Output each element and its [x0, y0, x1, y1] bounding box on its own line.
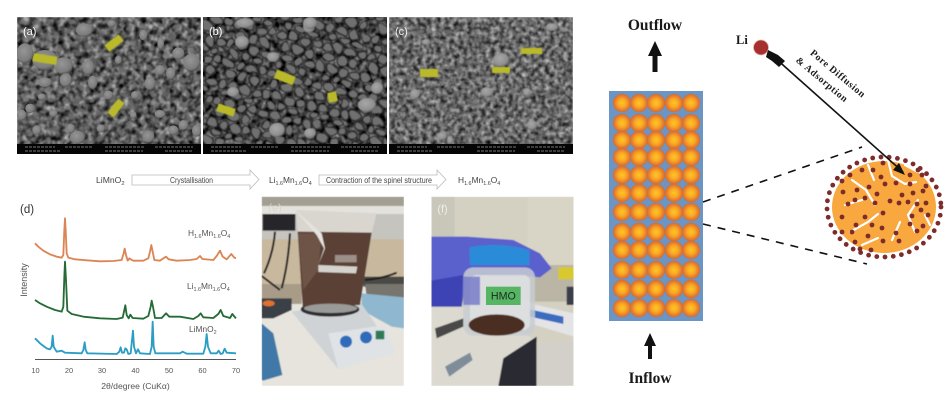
panel: SEM image (b) — [203, 17, 387, 154]
label (a): (a) — [23, 26, 36, 38]
trace label: Li1.6Mn1.6O4: O — [220, 281, 227, 291]
scale bar (b) — [203, 144, 387, 154]
label (d): (d) — [20, 204, 34, 216]
panel: porous adsorbent particle — [827, 157, 941, 257]
arrow: Contraction of the spinel structure: Contraction of the spinel structure — [326, 176, 432, 185]
trace: LiMnO2 — [35, 322, 236, 354]
arrow: inflow — [644, 333, 656, 359]
measurement tags (c) — [420, 48, 542, 77]
measurement tags (b) — [216, 70, 338, 117]
x axis: 2θ/degree (CuKα) — [101, 381, 170, 391]
heading: Outflow: Outflow — [628, 17, 683, 34]
y axis title: Intensity — [19, 263, 29, 297]
trace label: H1.6Mn1.6O4: H — [188, 228, 194, 238]
trace label: H1.6Mn1.6O4: O — [221, 228, 228, 238]
measurement tags (a) — [33, 34, 125, 118]
text: H1.6Mn1.6O4: 1.6 — [483, 181, 491, 187]
trace label: Li1.6Mn1.6O4: Li — [187, 281, 194, 291]
label (f): (f) — [437, 204, 448, 216]
text: H1.6Mn1.6O4: 4 — [497, 181, 500, 187]
scale bar (a) — [17, 144, 201, 154]
trace label: LiMnO2: 2 — [214, 330, 217, 336]
text: LiMnO2: LiMnO — [96, 175, 121, 185]
arrow: pore diffusion path — [766, 50, 905, 175]
adsorbed Li inside pores — [840, 161, 930, 252]
text: Li1.6Mn1.6O4: Mn — [283, 175, 295, 185]
dashed zoom lines — [703, 147, 867, 264]
x axis: 20 — [65, 366, 73, 375]
bead array — [613, 94, 700, 317]
panel: photo (f) HMO jar — [431, 197, 574, 386]
text: Li1.6Mn1.6O4: 1.6 — [276, 181, 283, 187]
heading: Inflow: Inflow — [628, 370, 672, 387]
outer ring of adsorbed Li — [827, 157, 941, 257]
HMO label: HMO — [491, 290, 516, 302]
trace label: Li1.6Mn1.6O4: 4 — [227, 287, 230, 293]
panel: XRD chart (d) — [19, 204, 240, 391]
trace label: Li1.6Mn1.6O4: Mn — [201, 281, 213, 291]
trace: H1.6Mn1.6O4 — [35, 218, 236, 261]
trace label: H1.6Mn1.6O4: Mn — [202, 228, 214, 238]
arrow: outflow — [648, 41, 662, 72]
text: H1.6Mn1.6O4: O — [491, 175, 498, 185]
trace label: H1.6Mn1.6O4: 1.6 — [194, 234, 202, 240]
trace label: Li1.6Mn1.6O4: 1.6 — [194, 287, 201, 293]
text: H1.6Mn1.6O4: H — [458, 175, 464, 185]
pore channels — [845, 160, 930, 245]
text: Li: Li — [736, 33, 748, 47]
text: H1.6Mn1.6O4: 1.6 — [464, 181, 472, 187]
scale bar (c) — [389, 144, 573, 154]
x axis: 60 — [198, 366, 207, 375]
x axis: 70 — [232, 366, 240, 375]
trace label: LiMnO2: LiMnO — [189, 324, 214, 334]
icon: lithium ion — [754, 40, 768, 55]
x axis: 40 — [131, 366, 140, 375]
text: LiMnO2: 2 — [121, 181, 125, 187]
trace: Li1.6Mn1.6O4 — [35, 262, 236, 319]
text: H1.6Mn1.6O4: Mn — [472, 175, 484, 185]
x axis: 30 — [98, 366, 106, 375]
panel: packed column of adsorbent beads — [609, 91, 703, 321]
x axis: 50 — [165, 366, 173, 375]
arrow: Contraction of the spinel structure — [319, 170, 446, 189]
label (b): (b) — [209, 26, 222, 38]
text: Pore Diffusion & Adsorption: Pore Diffusion — [808, 48, 868, 100]
trace label: H1.6Mn1.6O4: 4 — [227, 234, 230, 240]
arrow: Crystallisation — [132, 170, 259, 189]
arrow: Crystallisation: Crystallisation — [170, 176, 213, 185]
text: Li1.6Mn1.6O4: Li — [269, 175, 276, 185]
label (c): (c) — [395, 26, 408, 38]
panel: SEM image (c) — [389, 17, 573, 154]
trace label: Li1.6Mn1.6O4: 1.6 — [213, 287, 220, 293]
text: Li1.6Mn1.6O4: O — [302, 175, 309, 185]
label (e): (e) — [268, 203, 282, 215]
panel: photo (e) beaker on stirrer — [262, 197, 404, 386]
HMO label — [486, 287, 521, 305]
x axis: 10 — [31, 366, 40, 375]
panel: SEM image (a) — [17, 17, 201, 154]
x axis — [31, 360, 240, 391]
text: Li1.6Mn1.6O4: 1.6 — [295, 181, 302, 187]
text: Pore Diffusion & Adsorption: & Adsorption — [793, 55, 850, 105]
text: Li1.6Mn1.6O4: 4 — [309, 181, 312, 187]
trace label: H1.6Mn1.6O4: 1.6 — [213, 234, 221, 240]
particle core — [832, 161, 936, 253]
